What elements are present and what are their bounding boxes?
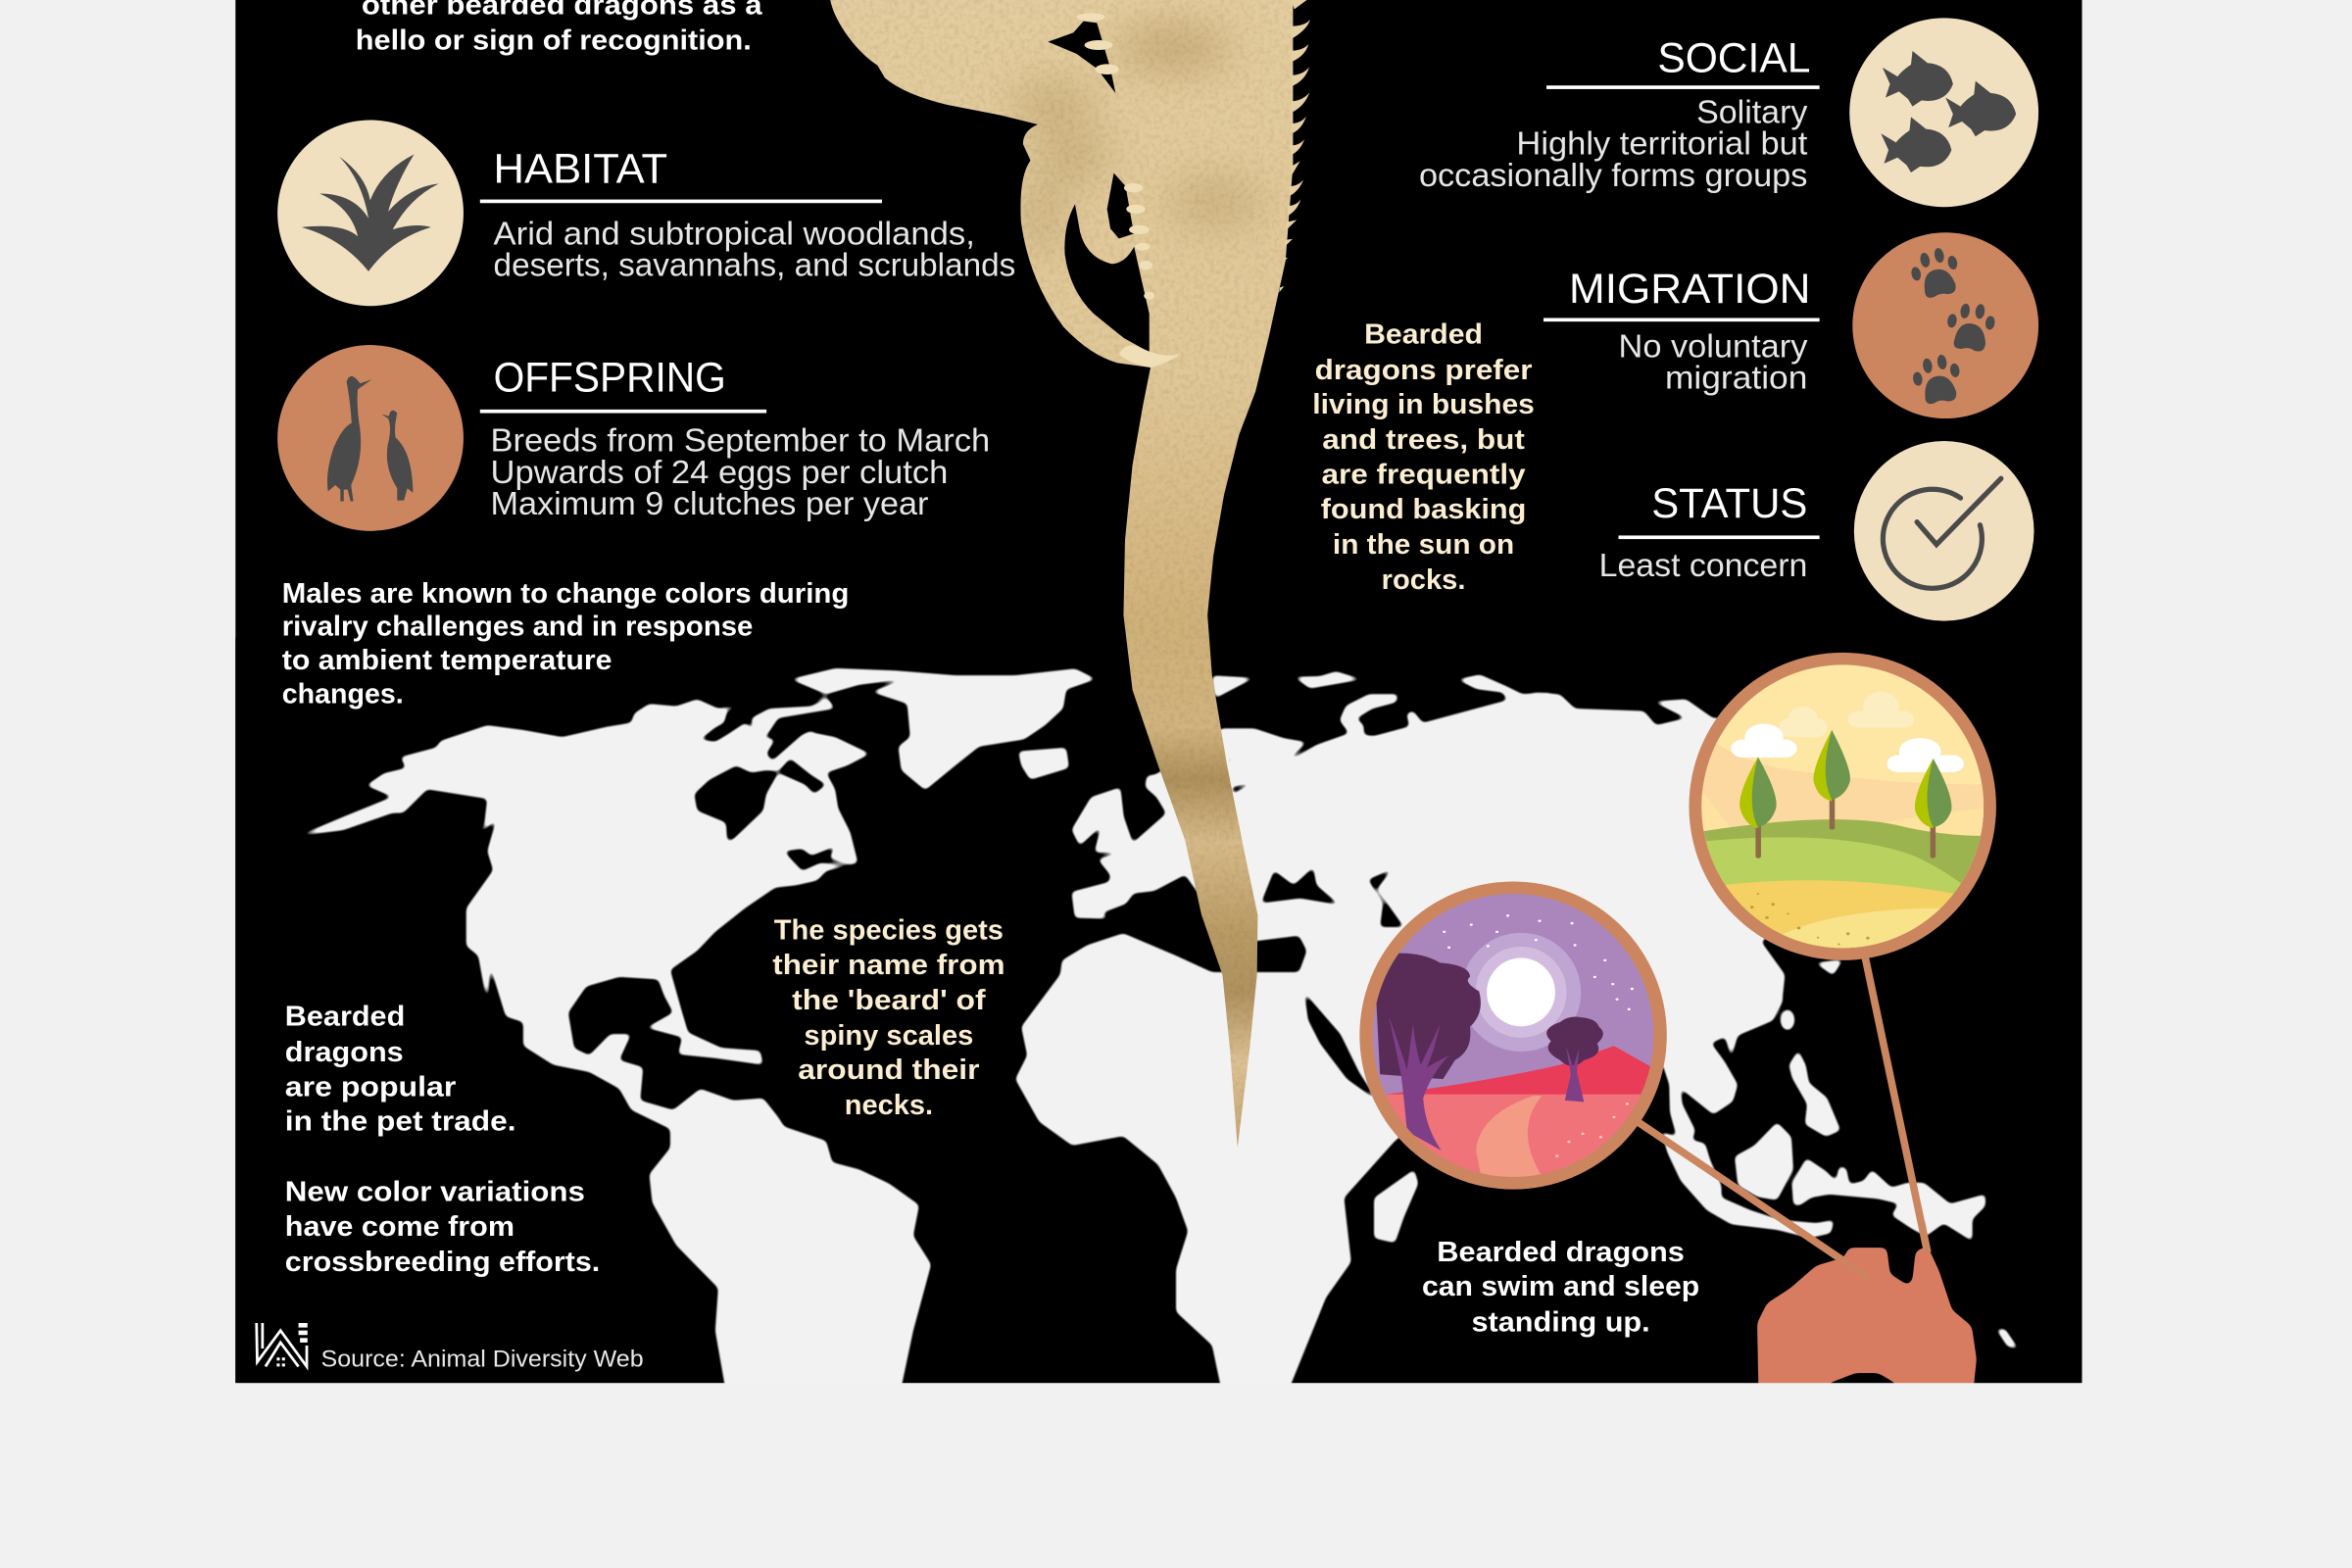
heading: SOCIAL (1657, 34, 1810, 81)
fact: pet trade: Bearded (285, 1000, 405, 1031)
body text: Upwards of 24 eggs per clutch (491, 454, 948, 490)
body text: Solitary (1696, 94, 1808, 130)
offspring block (277, 345, 990, 531)
fact: swim and sleep: can swim and sleep (1422, 1270, 1699, 1301)
fact: habitat preference: living in bushes (1312, 388, 1535, 419)
large tree (1374, 954, 1481, 1079)
offspring icon circle (277, 345, 464, 531)
map: australia highlighted (1757, 1247, 1977, 1404)
callout line ends fading into australia (1838, 1222, 1928, 1278)
red hill and ground (1374, 1046, 1656, 1096)
body text (491, 422, 990, 521)
fact: species name: around their (798, 1054, 979, 1085)
trees (1755, 797, 1936, 858)
lizard: gaps and black notches (1048, 0, 1310, 368)
body text: deserts, savannahs, and scrublands (494, 247, 1015, 283)
map: greenland (790, 668, 1097, 790)
fact: habitat preference: and trees, but (1322, 423, 1525, 455)
hills (1703, 819, 1981, 935)
faded clouds (1779, 692, 1914, 737)
fact: color change: to ambient temperature (282, 644, 612, 675)
fact: habitat preference: found basking (1321, 493, 1526, 524)
map: borneo (1735, 1122, 1793, 1200)
map: new guinea chain (1791, 1158, 1985, 1242)
fact: habitat preference: in the sun on (1333, 528, 1514, 560)
migration icon circle (1852, 232, 2038, 418)
body text: Least concern (1599, 547, 1807, 583)
body text: Maximum 9 clutches per year (491, 485, 928, 521)
map: philippines (1788, 1051, 1840, 1137)
fact: pet trade: dragons (285, 1036, 404, 1067)
top fact text: hello or sign of recognition. (356, 24, 752, 56)
body text: Arid and subtropical woodlands, (494, 215, 975, 251)
fact: swim and sleep: Bearded dragons (1437, 1236, 1685, 1267)
bottom page strip (0, 1383, 2352, 1568)
fact: pet trade: New color variations (285, 1176, 585, 1207)
body text (1619, 327, 1808, 395)
fact: species name: The species gets (774, 914, 1004, 946)
heading: OFFSPRING (494, 354, 726, 401)
fact: swim and sleep: standing up. (1472, 1305, 1650, 1337)
body text: Highly territorial but (1516, 125, 1807, 162)
night scene circle (1359, 881, 1667, 1190)
icon: check mark in circle (1883, 478, 2001, 588)
icon: logo mark (257, 1323, 308, 1366)
status block (1599, 441, 2034, 621)
fact: species name: necks. (845, 1089, 933, 1120)
heading: MIGRATION (1569, 266, 1810, 313)
body text: migration (1665, 359, 1807, 395)
map: taiwan (1781, 1009, 1794, 1030)
fact: habitat preference (1312, 318, 1535, 595)
stars (1443, 914, 1634, 1010)
fact: color change (282, 577, 849, 709)
heading: STATUS (1651, 480, 1807, 527)
fact: pet trade: have come from (285, 1210, 514, 1242)
social block (1419, 18, 2038, 207)
habitat block (277, 120, 1015, 306)
status icon circle (1854, 441, 2034, 621)
map: iceland (1018, 748, 1069, 780)
fact: habitat preference: are frequently (1321, 458, 1526, 489)
fact: species name: their name from (772, 949, 1005, 980)
fact: pet trade: in the pet trade. (285, 1105, 516, 1137)
top fact text (356, 0, 762, 56)
body text (494, 215, 1015, 283)
body text (1419, 94, 1808, 193)
callout line to day scene (1865, 954, 1928, 1252)
lizard: skin grain (831, 0, 1293, 1143)
world map (235, 638, 2082, 1417)
fact: color change: Males are known to change colors during (282, 577, 849, 609)
day scene circle (1689, 653, 1998, 960)
migration block (1544, 232, 2038, 418)
map: malay and sumatra (1661, 1132, 1835, 1238)
fact: species name: the 'beard' of (792, 984, 986, 1015)
icon: paw prints (1907, 245, 1997, 406)
icon: fish (1881, 51, 2016, 172)
map: new zealand (1996, 1329, 2019, 1349)
fact: swim and sleep (1422, 1236, 1699, 1337)
social icon circle (1849, 18, 2038, 207)
white clouds (1731, 724, 1964, 772)
fact: species name: spiny scales (804, 1019, 973, 1051)
small tree (1546, 1016, 1603, 1066)
body text: No voluntary (1619, 327, 1808, 364)
habitat icon circle (277, 120, 464, 306)
fact: pet trade (285, 1000, 600, 1277)
fact: color change: changes. (282, 677, 404, 709)
lizard tail and body (810, 0, 1320, 1170)
fact: pet trade: are popular (285, 1070, 456, 1102)
heading: HABITAT (494, 146, 667, 193)
black poster panel (235, 0, 2082, 1383)
map: madagascar (1374, 1169, 1418, 1243)
fact: habitat preference: dragons prefer (1315, 354, 1533, 385)
fact: pet trade: crossbreeding efforts. (285, 1246, 600, 1277)
icon: agave plant (302, 155, 439, 271)
icon: two herons (327, 376, 413, 502)
body text: occasionally forms groups (1419, 157, 1807, 193)
fact: habitat preference: Bearded (1364, 318, 1483, 350)
callout line to night scene (1638, 1122, 1869, 1278)
moon and halos (1461, 933, 1581, 1052)
fact: habitat preference: rocks. (1382, 564, 1465, 595)
body text: Breeds from September to March (491, 422, 990, 459)
fact: color change: rivalry challenges and in response (282, 611, 753, 642)
source line: Source: Animal Diversity Web (321, 1346, 644, 1372)
fact: species name (772, 914, 1005, 1120)
